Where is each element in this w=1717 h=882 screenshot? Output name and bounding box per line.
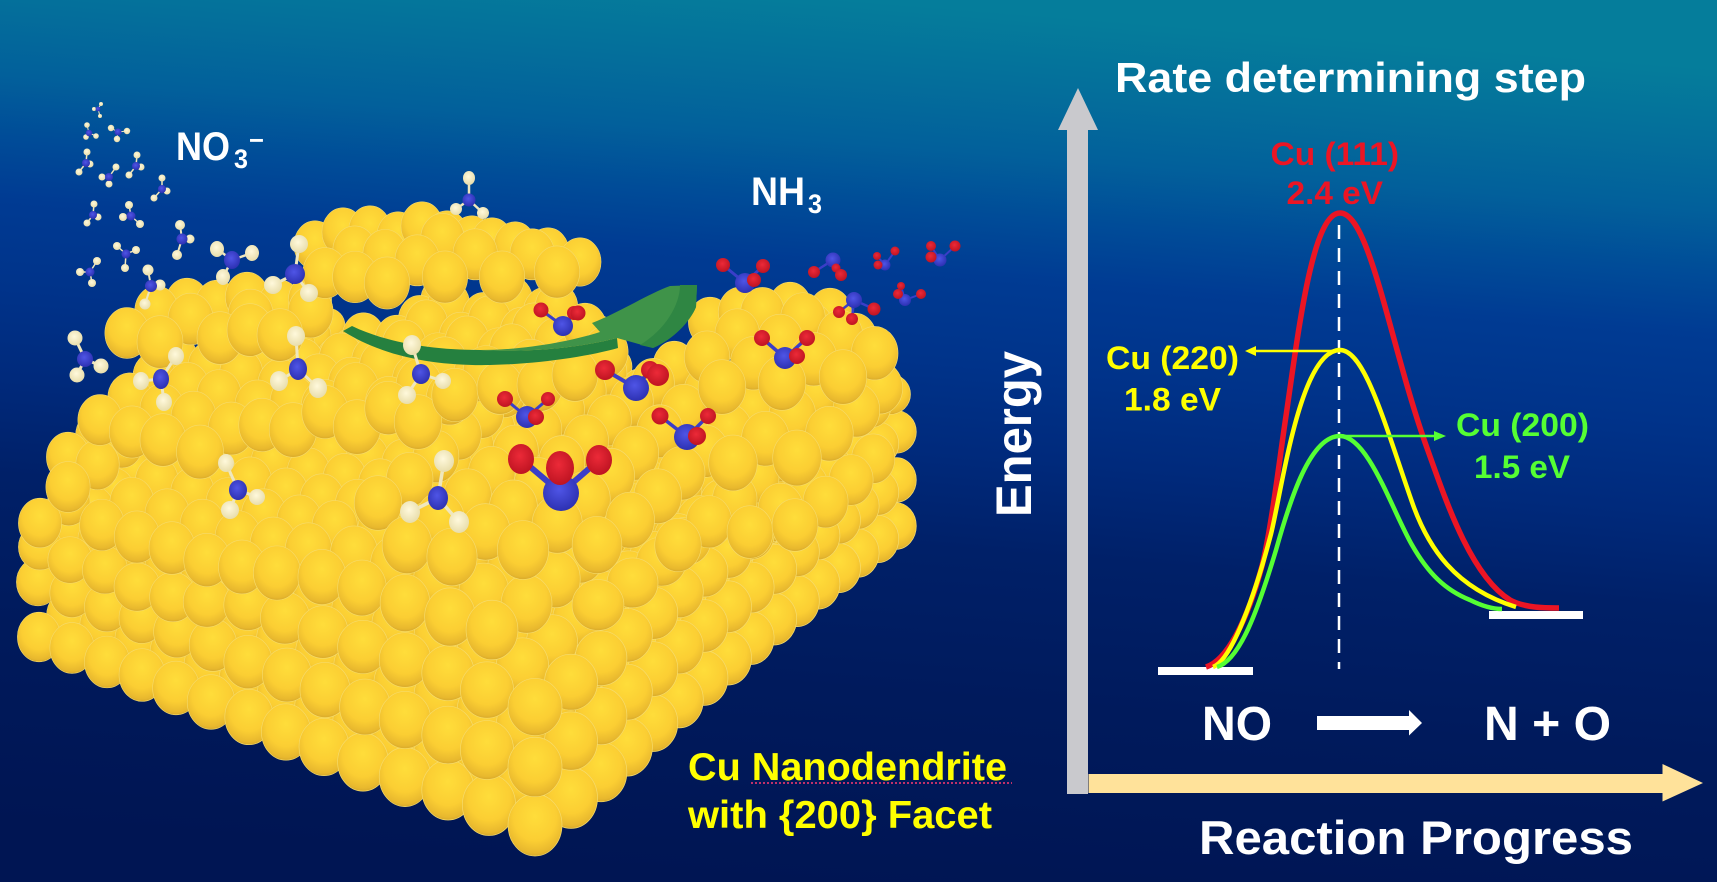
molecule 17 [68,330,108,382]
molecule 8 [84,200,102,226]
molecule 10 [172,220,194,260]
label: NO3 minus [176,125,264,174]
chart title: Rate determining step: Rate determining step [1115,54,1586,101]
label: NO3 minus: − [249,125,264,155]
lattice layer 6 terrace [105,272,333,368]
energy diagram [1158,213,1583,675]
label: N + O: N + O [1484,698,1611,751]
label: NH3: NH [751,170,805,214]
lattice layer 3 terrace [18,374,910,660]
red molecule 12 large [508,444,612,511]
white reaction arrow [1317,710,1422,736]
molecule 20 [398,335,451,404]
label: NO3 minus: NO [176,125,230,169]
label: NO3 minus: 3 [234,144,248,174]
leader arrow to Cu (220) [1245,346,1340,356]
red molecule 6 [893,282,926,306]
red molecule 10 [497,391,555,428]
label: Cu (111) 2.4 eV: Cu (111) [1270,136,1399,172]
lattice layer 5 terrace [78,274,628,479]
lattice layer 0 [17,379,916,856]
label: Cu (111) 2.4 eV: 2.4 eV [1286,175,1384,211]
label: Cu Nanodendrite with {200} Facet: with {200} Facet [687,794,992,837]
molecule 16 [450,171,489,219]
molecule 15 [264,235,318,302]
molecule 12 [76,257,101,287]
molecule 13 [140,264,166,310]
label: Cu (111) 2.4 eV [1270,136,1399,211]
molecule 1 [92,102,103,118]
lattice layer 2 [18,308,916,736]
red molecule 4 [926,240,960,266]
label: Cu (200) 1.5 eV [1456,407,1589,485]
red molecule 7 [534,302,586,336]
curve: Cu (200) [1217,436,1502,667]
nitrate-type molecules over lattice and in solution [497,240,960,511]
lattice layer 4 terrace [354,341,895,586]
red molecule 9 [595,360,669,401]
dashed transition state line [1338,225,1340,669]
molecule 11 [113,242,140,272]
curve: Cu (220) [1213,350,1516,667]
product level bar [1489,611,1583,619]
label: NH3: 3 [808,189,822,219]
molecule 9 [119,201,144,228]
copper nanodendrite atom lattice [16,202,916,856]
ammonia-type molecules over lattice and in solution [68,102,489,533]
label: Cu Nanodendrite with {200} Facet: Cu Nanodendrite [688,746,1007,789]
axis label: Energy: Energy [986,351,1042,517]
label: Cu (220) 1.8 eV [1106,340,1239,418]
lattice right upper terrace [709,362,903,491]
label: Cu Nanodendrite with {200} Facet [687,746,1012,837]
curve: Cu (111) [1206,213,1559,667]
molecule 5 [98,164,120,188]
label: Cu (200) 1.5 eV: 1.5 eV [1474,449,1571,485]
reaction progress axis arrow [1088,764,1703,802]
label: Cu (220) 1.8 eV: Cu (220) [1106,340,1239,376]
molecule 7 [150,174,170,202]
energy axis arrow [1058,88,1098,794]
red molecule 8 [754,330,815,369]
lattice layer 1 [16,334,916,797]
molecule 4 [76,148,94,176]
reactant level bar [1158,667,1253,675]
curved green reaction arrow [343,285,697,365]
red molecule 1 [716,258,770,293]
molecule 2 [83,122,99,140]
molecule 21 [218,454,265,519]
red molecule 11 [652,408,716,450]
molecule 19 [270,326,327,398]
molecule 22 [400,450,469,533]
molecule 3 [108,125,130,142]
molecule 18 [133,347,184,411]
red molecule 3 [873,246,900,270]
label: Cu (220) 1.8 eV: 1.8 eV [1124,382,1222,418]
lattice top terrace [294,202,601,309]
molecule 6 [126,152,144,178]
label: Cu (200) 1.5 eV: Cu (200) [1456,407,1589,443]
lattice right mound [684,282,898,414]
label: NO: NO [1202,698,1272,751]
red molecule 2 [808,252,847,281]
leader arrow to Cu (200) [1340,431,1446,441]
axis label: Reaction Progress: Reaction Progress [1199,811,1633,864]
red molecule 5 [833,292,880,325]
molecule 14 [210,241,259,285]
